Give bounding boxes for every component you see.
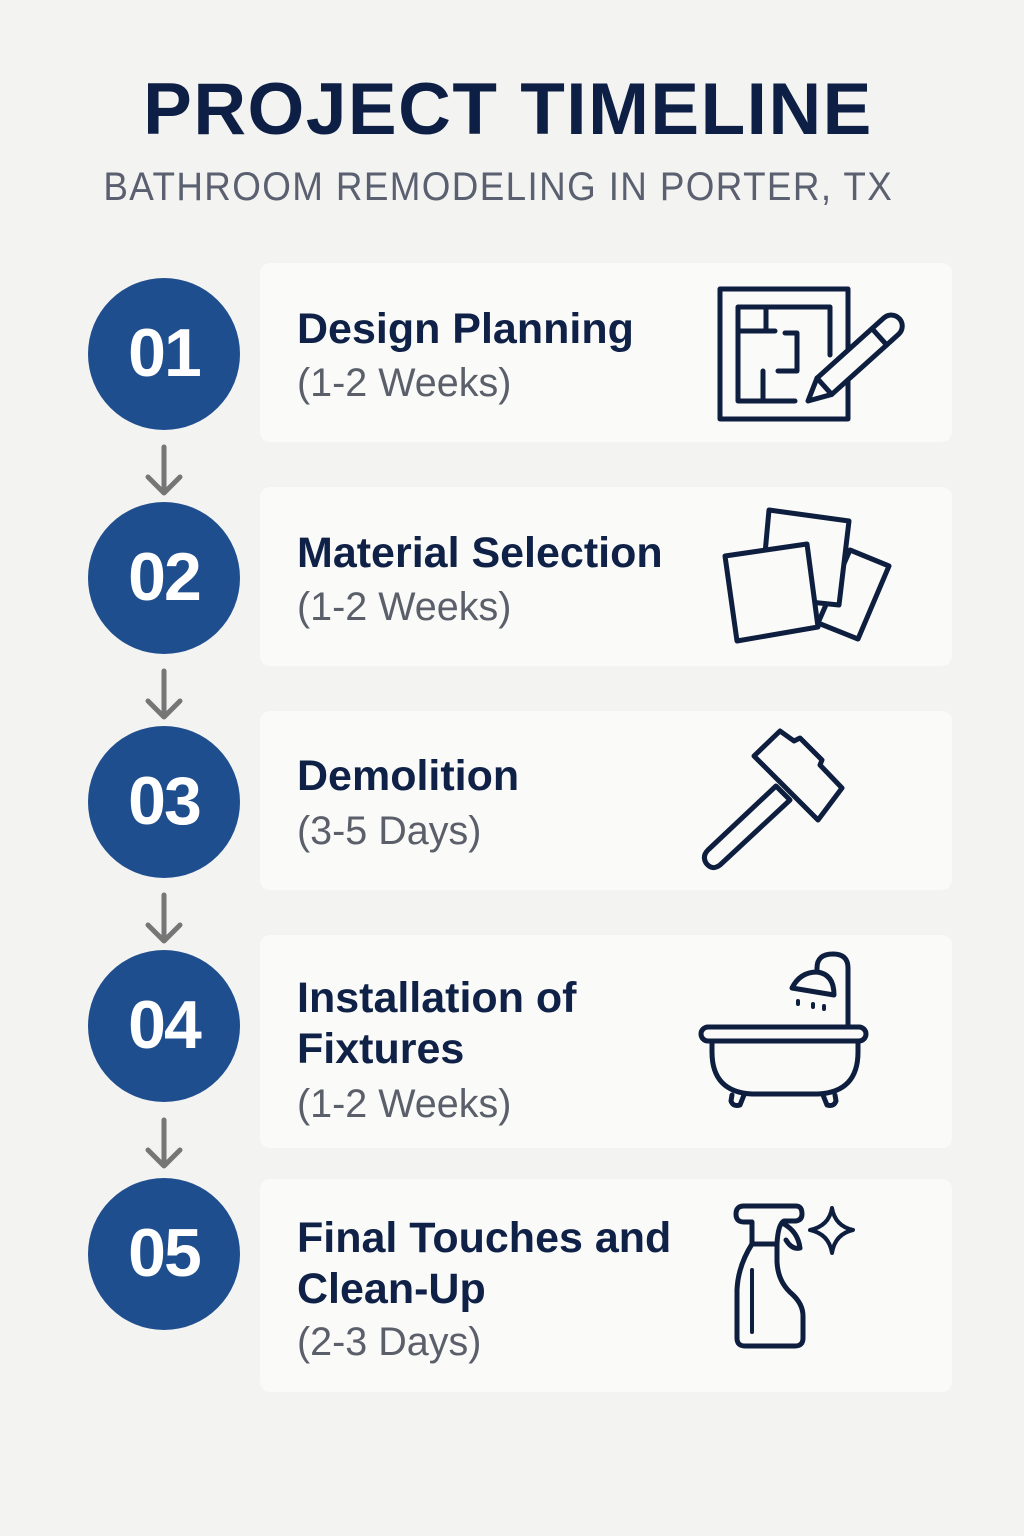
step 5 text: Clean-Up [297, 1265, 486, 1313]
icon: floor plan with pencil [720, 289, 907, 419]
icon: hammer [704, 731, 842, 868]
icon: tiles [725, 510, 889, 641]
step 3 text: (3-5 Days) [297, 809, 481, 853]
step 5 text: Final Touches and [297, 1214, 671, 1262]
step numbers: 04 [128, 987, 200, 1063]
title: PROJECT TIMELINE [143, 69, 873, 150]
step numbers: 02 [128, 539, 200, 615]
step 1 text: Design Planning [297, 305, 634, 353]
step 4 text: Fixtures [297, 1025, 464, 1073]
card 2 [260, 487, 952, 666]
step numbers: 03 [128, 763, 200, 839]
step numbers: 05 [128, 1215, 200, 1291]
step 5 text: (2-3 Days) [297, 1320, 481, 1364]
card 4 [260, 935, 952, 1148]
step 3 text [297, 752, 519, 853]
step 4 text: Installation of [297, 974, 576, 1022]
step circles [88, 278, 240, 1330]
step numbers [128, 315, 202, 1291]
icon: spray bottle with sparkle [736, 1206, 853, 1346]
step 5 text [297, 1214, 671, 1364]
step 2 text: (1-2 Weeks) [297, 585, 511, 629]
arrows [148, 447, 180, 1166]
step 2 text: Material Selection [297, 529, 663, 577]
card 3 [260, 711, 952, 890]
icon: bathtub [701, 954, 866, 1106]
card 5 [260, 1179, 952, 1392]
step 2 text [297, 529, 663, 629]
card 1 [260, 263, 952, 442]
step 1 text: (1-2 Weeks) [297, 361, 511, 405]
subtitle: BATHROOM REMODELING IN PORTER, TX [103, 165, 893, 209]
step 1 text [297, 305, 634, 405]
step 3 text: Demolition [297, 752, 519, 800]
step numbers: 01 [128, 315, 200, 391]
step 4 text [297, 974, 577, 1126]
step 4 text: (1-2 Weeks) [297, 1082, 511, 1126]
